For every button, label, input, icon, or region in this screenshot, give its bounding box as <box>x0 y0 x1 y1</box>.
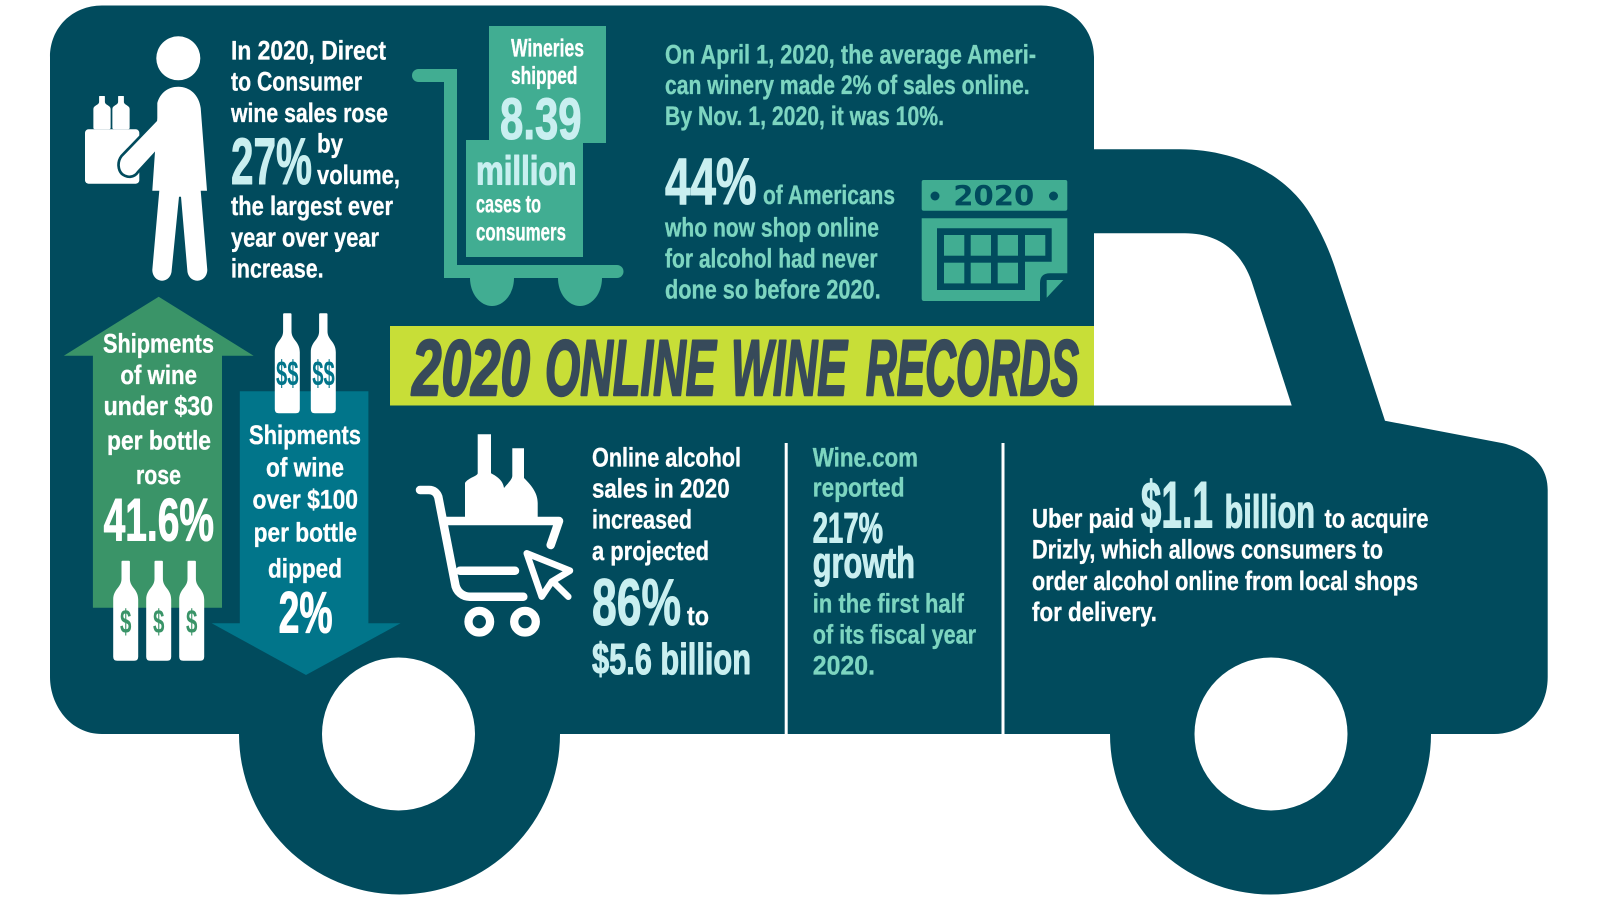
text: 44 percent of Americans: of Americans <box>763 180 895 210</box>
icon: two bottles <box>275 313 336 413</box>
text: Wine.com growth: in the first half <box>813 588 965 618</box>
arrow: under $30 up: Shipments <box>103 329 214 359</box>
text: Uber acquires Drizly: to acquire <box>1324 503 1428 533</box>
text: Wine.com growth: 2020. <box>813 650 875 680</box>
text: online alcohol sales: Online alcohol <box>592 443 741 473</box>
arrow: over $100 down: Shipments <box>249 420 361 450</box>
icon: three bottles <box>113 561 204 661</box>
arrow: under $30 up: under $30 <box>104 391 213 421</box>
arrow: over $100 down <box>212 391 400 675</box>
text: direct to consumer sales: by <box>317 129 343 159</box>
text: online sales share: By Nov. 1, 2020, it was 10%. <box>665 101 944 131</box>
text: online alcohol sales <box>592 443 751 684</box>
text: online alcohol sales: to <box>687 601 709 631</box>
text: direct to consumer sales: increase. <box>231 254 324 284</box>
text: online sales share: On April 1, 2020, the average Ameri- <box>665 39 1036 69</box>
text: 44 percent of Americans: done so before 2020. <box>665 274 881 304</box>
text: direct to consumer sales: volume, <box>317 160 400 190</box>
text: 44 percent of Americans: who now shop online <box>664 213 879 243</box>
title banner: RECORDS <box>866 323 1079 412</box>
text: Wine.com growth: of its fiscal year <box>813 619 976 649</box>
icon: 2020 calendar <box>922 179 1067 301</box>
text: online sales share <box>665 39 1036 131</box>
text: direct to consumer sales: year over year <box>231 222 379 252</box>
text: wineries shipped: 8.39 <box>500 87 582 152</box>
text: direct to consumer sales <box>230 36 400 284</box>
text: 44 percent of Americans <box>664 144 895 304</box>
text: Uber acquires Drizly: Drizly, which allows consumers to <box>1032 534 1383 564</box>
text: wineries shipped: Wineries <box>511 35 584 63</box>
arrow: under $30 up: 41.6% <box>104 487 214 554</box>
arrow: under $30 up <box>64 297 254 608</box>
text: wineries shipped: shipped <box>511 62 578 90</box>
text: online alcohol sales: a projected <box>592 536 709 566</box>
icon: person carrying wine <box>85 36 207 281</box>
text: Wine.com growth: 217% <box>813 504 883 552</box>
text: Wine.com growth <box>813 443 976 680</box>
title banner: 2020 <box>411 323 530 412</box>
icon: hand truck with boxes <box>412 26 624 306</box>
text: Uber acquires Drizly: billion <box>1224 485 1315 537</box>
title banner: WINE <box>731 323 848 412</box>
text: 44 percent of Americans: 44% <box>665 144 757 218</box>
arrow: over $100 down: per bottle <box>254 518 357 548</box>
arrow: under $30 up: rose <box>136 460 181 490</box>
text: online alcohol sales: sales in 2020 <box>592 473 730 503</box>
text: Uber acquires Drizly: for delivery. <box>1032 597 1157 627</box>
text: online sales share: can winery made 2% of sales online. <box>665 70 1030 100</box>
icon: 2020 calendar: 2020 <box>953 179 1034 212</box>
text: online alcohol sales: 86% <box>592 565 681 639</box>
arrow: over $100 down: of wine <box>266 453 344 483</box>
text: direct to consumer sales: 27% <box>231 124 312 198</box>
arrow: under $30 up: of wine <box>120 360 197 390</box>
text: wineries shipped <box>476 35 584 247</box>
text: direct to consumer sales: the largest ever <box>231 191 393 221</box>
icon: shopping cart <box>420 434 570 632</box>
text: 44 percent of Americans: for alcohol had never <box>665 244 878 274</box>
text: Wine.com growth: growth <box>813 538 915 587</box>
text: online alcohol sales: $5.6 billion <box>592 635 751 684</box>
icon: three bottles: $ <box>120 603 131 640</box>
icon: two bottles: $$ <box>276 354 298 394</box>
text: Uber acquires Drizly <box>1032 467 1428 627</box>
title banner: ONLINE <box>545 323 717 412</box>
text: Wine.com growth: reported <box>813 473 905 503</box>
title banner <box>390 323 1094 412</box>
text: wineries shipped: million <box>476 147 576 193</box>
text: wineries shipped: consumers <box>476 219 566 247</box>
text: Uber acquires Drizly: Uber paid <box>1032 503 1134 533</box>
icon: three bottles: $ <box>186 603 197 640</box>
arrow: under $30 up: per bottle <box>107 426 211 456</box>
arrow: over $100 down: dipped <box>268 553 342 583</box>
text: Uber acquires Drizly: $1.1 <box>1141 467 1213 541</box>
text: Wine.com growth: Wine.com <box>813 443 918 473</box>
arrow: over $100 down: over $100 <box>252 485 358 515</box>
arrow: over $100 down: 2% <box>279 580 333 645</box>
icon: two bottles: $$ <box>312 354 335 394</box>
text: wineries shipped: cases to <box>476 191 541 219</box>
text: Uber acquires Drizly: order alcohol online from local shops <box>1032 566 1418 596</box>
text: direct to consumer sales: wine sales rose <box>230 98 388 128</box>
text: direct to consumer sales: to Consumer <box>231 67 362 97</box>
text: direct to consumer sales: In 2020, Direct <box>231 36 386 66</box>
icon: three bottles: $ <box>153 603 164 640</box>
text: online alcohol sales: increased <box>592 504 692 534</box>
